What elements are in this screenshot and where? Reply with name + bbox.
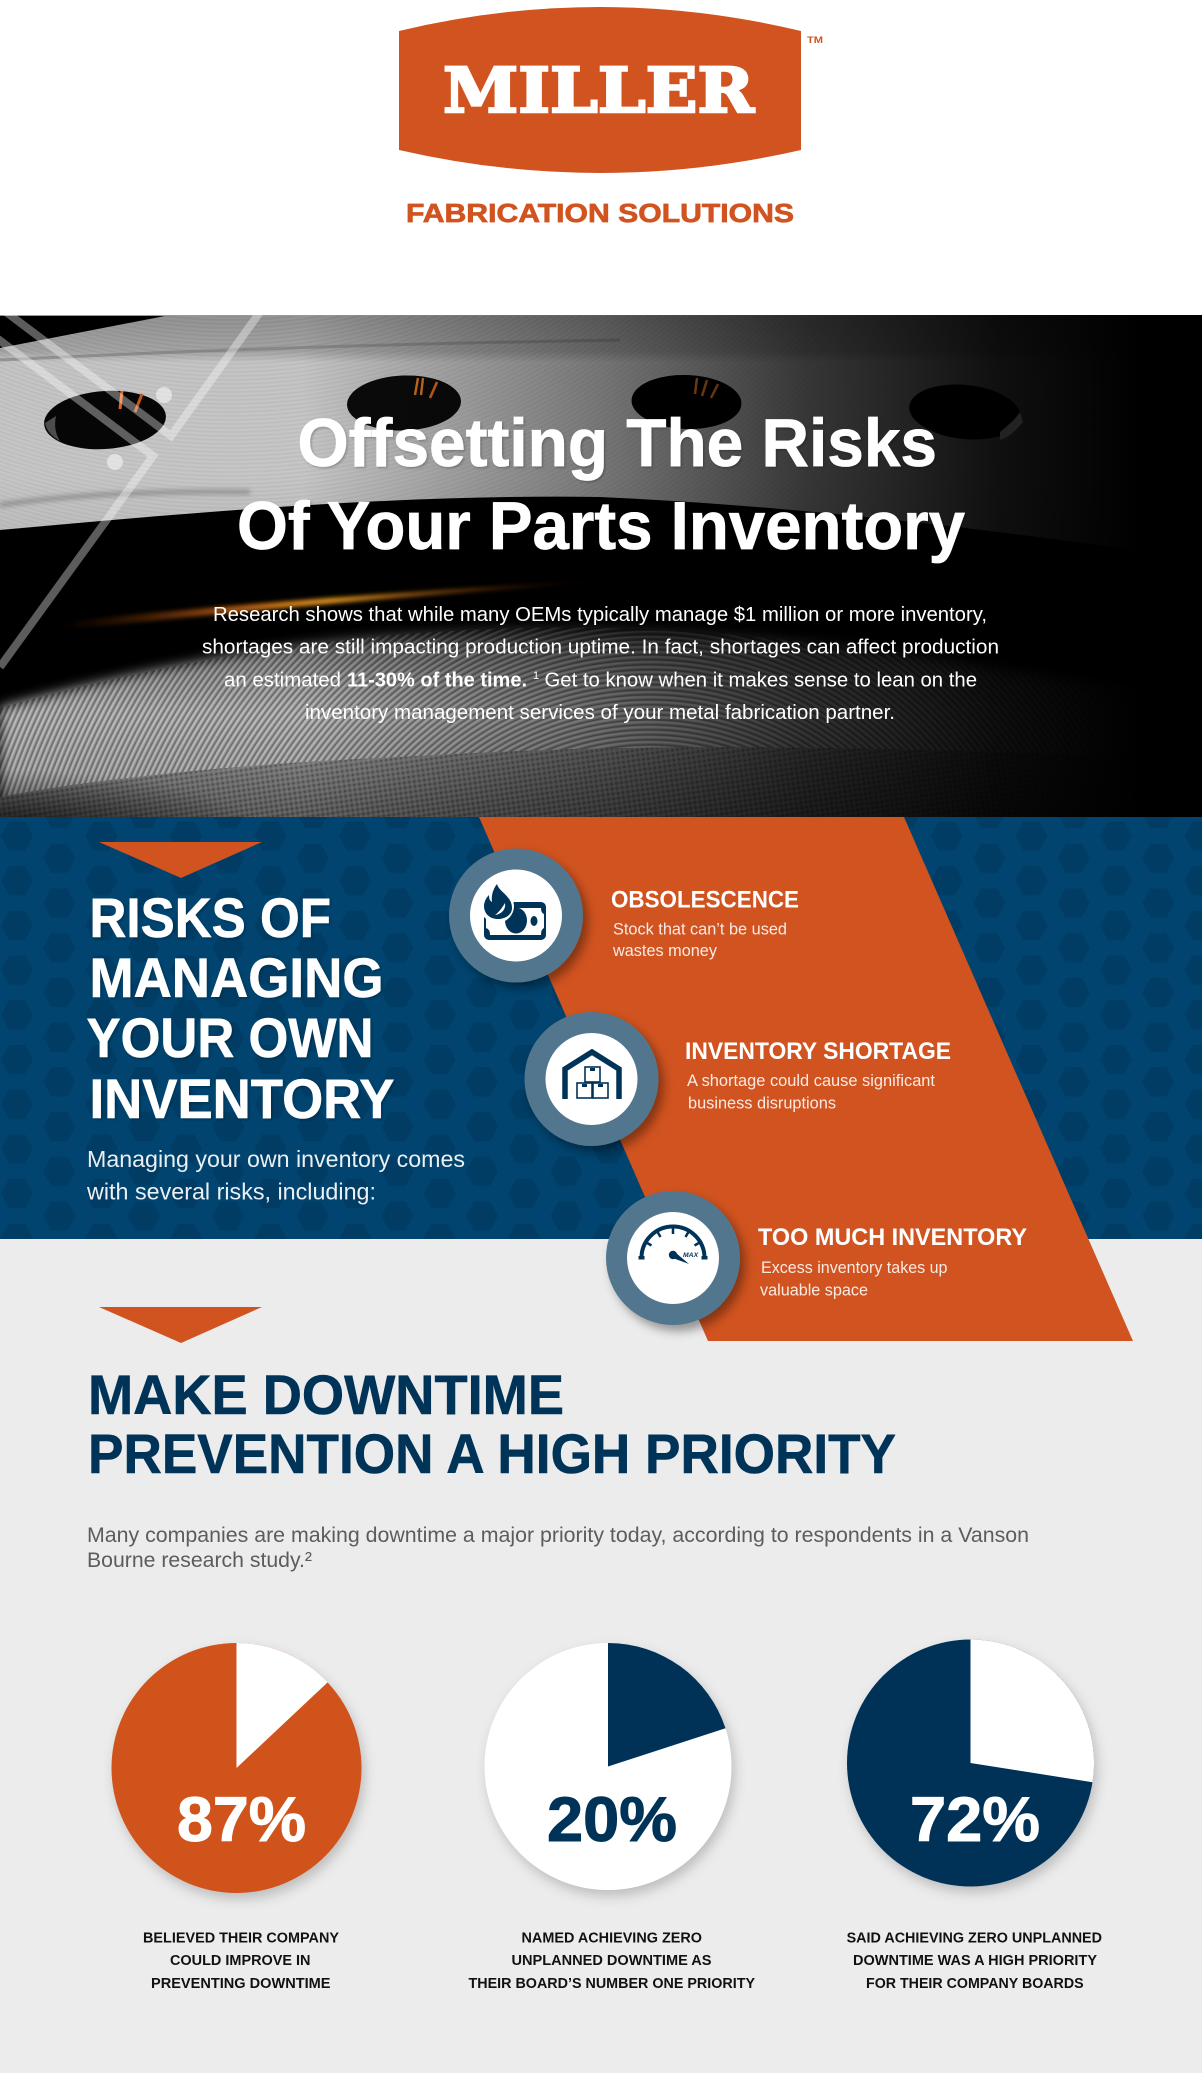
pie chart 87% <box>112 1643 362 1893</box>
risks intro text: Managing your own inventory comes <box>87 1146 465 1172</box>
caption 20%: THEIR BOARD’S NUMBER ONE PRIORITY <box>468 1976 755 1992</box>
panel: downtime background <box>0 1239 1202 2073</box>
hero title: Of Your Parts Inventory <box>237 488 965 564</box>
caption 87%: BELIEVED THEIR COMPANY <box>143 1931 339 1947</box>
orange triangle marker <box>99 842 262 878</box>
trademark: TM <box>807 35 823 46</box>
caption 20% <box>468 1931 755 1992</box>
obsolescence text: Stock that can’t be used <box>613 920 787 938</box>
downtime intro text: Many companies are making downtime a major priority today, according to respondents in a Vanson <box>87 1524 1029 1547</box>
downtime heading <box>88 1363 896 1485</box>
icon: gauge <box>606 1191 740 1325</box>
too much inventory heading: TOO MUCH INVENTORY <box>758 1224 1027 1251</box>
caption 87%: PREVENTING DOWNTIME <box>151 1976 331 1992</box>
hero body text: 11-30% of the time. <box>347 670 527 692</box>
pie chart 72% <box>847 1640 1094 1886</box>
downtime heading: MAKE DOWNTIME <box>88 1363 564 1426</box>
hero body text: Get to know when it makes sense to lean on the <box>544 670 977 692</box>
hero body text <box>202 604 999 724</box>
hero body text: 1 <box>533 670 539 682</box>
risks heading: RISKS OF <box>90 886 331 949</box>
caption 72%: DOWNTIME WAS A HIGH PRIORITY <box>853 1953 1097 1969</box>
inventory shortage text: A shortage could cause significant <box>687 1072 935 1090</box>
inventory shortage text <box>687 1072 935 1113</box>
caption 72% <box>847 1931 1102 1992</box>
downtime intro text <box>87 1524 1029 1572</box>
risk: obsolescence <box>449 848 799 982</box>
logo <box>399 7 823 228</box>
risks heading: INVENTORY <box>90 1067 394 1130</box>
obsolescence heading: OBSOLESCENCE <box>611 886 799 914</box>
stat: 87% <box>112 1643 362 1992</box>
risk: too much inventory <box>606 1191 1027 1325</box>
hole 2 <box>346 374 462 432</box>
caption 87%: COULD IMPROVE IN <box>170 1953 310 1969</box>
hero title: Offsetting The Risks <box>298 405 937 481</box>
pie chart 20% <box>484 1643 732 1890</box>
hole 1 <box>44 390 166 450</box>
too much inventory text: Excess inventory takes up <box>761 1259 948 1277</box>
logo tagline: FABRICATION SOLUTIONS <box>406 198 794 228</box>
orange triangle marker <box>99 1307 262 1343</box>
value 72%: 72% <box>910 1785 1040 1855</box>
hero title <box>237 405 965 564</box>
risks intro text <box>86 1146 465 1204</box>
risks intro text: with several risks, including: <box>86 1178 376 1204</box>
icon: gauge: MAX <box>683 1252 699 1259</box>
hole 5 <box>1192 403 1202 457</box>
stat: 20% <box>468 1643 755 1992</box>
risks heading <box>86 886 394 1130</box>
hero body text: an estimated <box>224 670 341 692</box>
hole 4 <box>909 384 1023 440</box>
value 87%: 87% <box>177 1785 306 1855</box>
stat: 72% <box>847 1640 1102 1992</box>
caption 72%: SAID ACHIEVING ZERO UNPLANNED <box>847 1931 1102 1947</box>
orange glow <box>74 583 550 628</box>
caption 20%: UNPLANNED DOWNTIME AS <box>512 1953 712 1969</box>
hero body text: shortages are still impacting production uptime. In fact, shortages can affect production <box>202 637 999 659</box>
caption 72%: FOR THEIR COMPANY BOARDS <box>866 1976 1084 1992</box>
obsolescence text <box>612 920 787 960</box>
obsolescence text: wastes money <box>612 942 718 960</box>
caption 20%: NAMED ACHIEVING ZERO <box>522 1931 702 1947</box>
panel: hero photo background <box>0 315 1202 817</box>
hole 3 <box>631 373 742 431</box>
risk: inventory shortage <box>524 1012 951 1146</box>
downtime heading: PREVENTION A HIGH PRIORITY <box>88 1422 896 1485</box>
hero body text: Research shows that while many OEMs typically manage $1 million or more inventory, <box>213 604 987 626</box>
logo badge <box>399 7 801 173</box>
downtime intro text: Bourne research study.² <box>87 1549 312 1572</box>
logo wordmark: MILLER <box>443 54 755 127</box>
inventory shortage heading: INVENTORY SHORTAGE <box>685 1038 951 1065</box>
decorative overlay lines <box>0 312 260 667</box>
risks heading: YOUR OWN <box>86 1006 374 1069</box>
icon: warehouse <box>524 1012 658 1146</box>
risks heading: MANAGING <box>90 946 384 1009</box>
panel: risks background <box>0 817 1202 1239</box>
too much inventory text: valuable space <box>760 1282 868 1300</box>
inventory shortage text: business disruptions <box>688 1095 836 1113</box>
hero body text: inventory management services of your metal fabrication partner. <box>305 702 895 724</box>
caption 87% <box>143 1931 339 1992</box>
too much inventory text <box>760 1259 948 1300</box>
orange parallelogram <box>479 817 1133 1341</box>
value 20%: 20% <box>547 1785 677 1855</box>
icon: burning money <box>449 848 583 982</box>
